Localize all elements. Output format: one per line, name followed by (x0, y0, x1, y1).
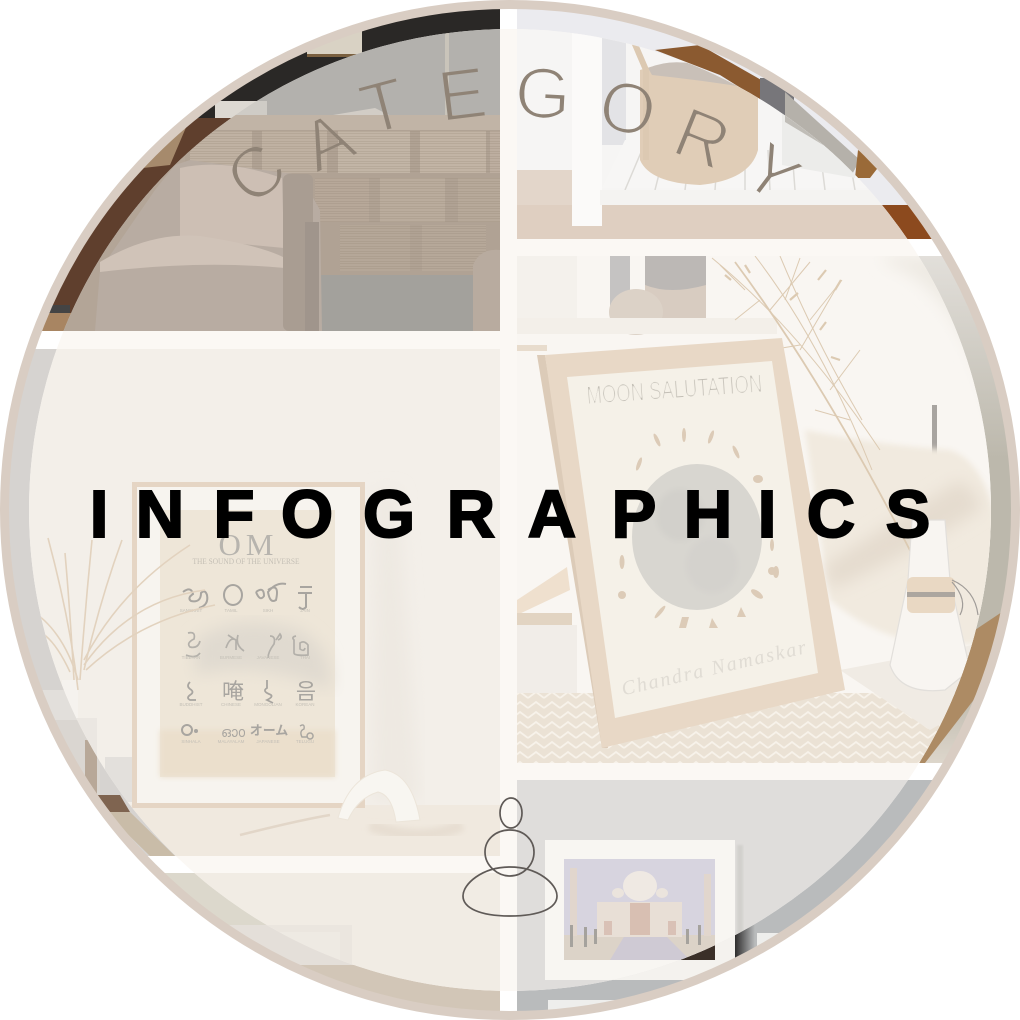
symbol captions: SIKH (263, 608, 273, 613)
symbol captions: JAPANESE (256, 739, 280, 744)
symbol captions: BUDDHIST (179, 702, 203, 707)
main title: INFOGRAPHICS: P (612, 477, 656, 552)
moon (632, 464, 762, 610)
row 1 symbols (183, 584, 312, 609)
main title: INFOGRAPHICS: F (214, 477, 254, 552)
symbol captions: CHINESE (221, 702, 241, 707)
main title: INFOGRAPHICS: C (807, 477, 855, 552)
curved heading: CATEGORY: G (513, 53, 573, 135)
striped throw (782, 114, 855, 178)
main title: INFOGRAPHICS: N (136, 477, 184, 552)
poster title: MOON SALUTATION (586, 370, 763, 410)
symbol captions: MALAYALAM (218, 739, 245, 744)
main title: INFOGRAPHICS: I (90, 477, 108, 552)
photo panel: lower left frame (195, 873, 500, 990)
diffuser bottle (890, 520, 978, 691)
row 3 symbols: 唵 (222, 674, 244, 706)
icon: meditating figure (463, 798, 557, 916)
curved heading: CATEGORY: Y (729, 127, 815, 220)
photo panel: white bench with woven basket (517, 38, 908, 239)
photo panel: living room sofa and wooden console (64, 29, 500, 331)
main title: INFOGRAPHICS: O (281, 477, 333, 552)
symbol captions: SINHALA (181, 739, 201, 744)
photo panel: moon salutation frame (517, 256, 1020, 763)
OM symbols grid: 음 (296, 674, 316, 706)
OM frame (132, 482, 365, 808)
poster subtitle: THE SOUND OF THE UNIVERSE (192, 557, 300, 566)
bed and curtain (806, 257, 991, 645)
OM symbols grid (179, 584, 316, 744)
dried branches (712, 256, 910, 551)
curved heading: CATEGORY: C (211, 126, 302, 221)
symbol captions: JAIN (300, 608, 310, 613)
symbol captions: TIBETAN (182, 655, 200, 660)
curved heading: CATEGORY: T (352, 63, 415, 151)
poster subtitle: Chandra Namaskar (619, 636, 810, 700)
main title: INFOGRAPHICS: I (758, 477, 776, 552)
symbol captions: TELUGU (296, 739, 314, 744)
row 4 symbols: ഓ൦ (221, 724, 246, 740)
sofa (95, 160, 500, 331)
OM symbols grid: オーム (250, 720, 288, 739)
symbol captions: SANSKRIT (180, 608, 202, 613)
symbol captions: TAMIL (225, 608, 238, 613)
photo panel: OM poster (0, 349, 500, 856)
poster title: OM (218, 527, 274, 562)
sculpted arch object (240, 770, 462, 835)
curved heading: CATEGORY (211, 52, 815, 221)
main title: INFOGRAPHICS: A (528, 477, 576, 552)
main title: INFOGRAPHICS: S (886, 477, 930, 552)
main title: INFOGRAPHICS: H (684, 477, 732, 552)
symbol captions: THAI (300, 655, 310, 660)
curved heading: CATEGORY: E (434, 52, 491, 138)
palm leaves (41, 538, 215, 690)
symbol captions: JAVANESE (257, 655, 279, 660)
woven basket (634, 42, 758, 185)
main title: INFOGRAPHICS: R (447, 477, 495, 552)
curved heading: CATEGORY: R (663, 92, 741, 186)
symbol captions (179, 608, 315, 744)
row 2 symbols (186, 633, 308, 658)
curved heading: CATEGORY: A (289, 95, 367, 188)
symbol captions: KOREAN (295, 702, 315, 707)
photo panel: Taj Mahal picture on wall (517, 780, 908, 990)
white blocks (86, 736, 132, 802)
symbol captions: BURMESE (220, 655, 242, 660)
picture frame (537, 338, 845, 748)
curved heading: CATEGORY: O (592, 64, 663, 154)
white picture frame (545, 840, 743, 980)
symbol captions: MONGOLIAN (254, 702, 282, 707)
main title: INFOGRAPHICS (90, 477, 930, 552)
yoga pose ring (618, 428, 779, 628)
main title: INFOGRAPHICS: G (363, 477, 415, 552)
